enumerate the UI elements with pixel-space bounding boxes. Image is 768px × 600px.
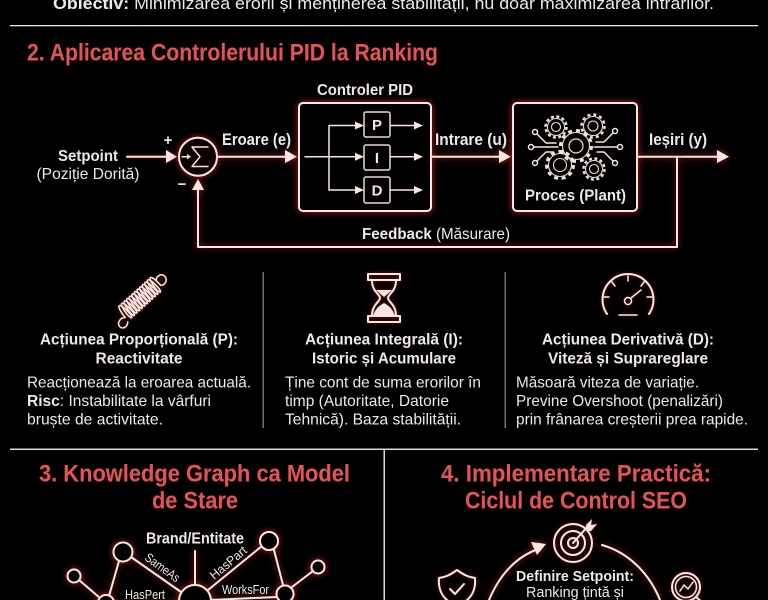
label: controler PID: Controler PID xyxy=(317,82,413,99)
label: intrare: Intrare (u) xyxy=(435,131,507,149)
text: define setpoint xyxy=(516,568,634,600)
text: integral description: timp (Autoritate, Datorie xyxy=(285,393,449,410)
plus sign: + xyxy=(164,132,173,149)
panel: SEO control cycle xyxy=(439,460,711,600)
heading: derivative xyxy=(542,332,714,368)
cycle arcs xyxy=(489,542,660,600)
text: proportional description: Reacționează la eroarea actuală. xyxy=(27,374,251,392)
heading: integral: Istoric și Acumulare xyxy=(312,350,456,368)
setpoint label: Setpoint xyxy=(58,148,119,165)
heading: section 2: 2. Aplicarea Controlerului PID la Ranking xyxy=(27,40,438,66)
heading: proportional xyxy=(40,332,238,368)
text: proportional description xyxy=(27,374,251,428)
heading: section 4 xyxy=(441,460,711,514)
text: derivative description: Măsoară viteza de variație. xyxy=(516,374,699,392)
label: brand entity: Brand/Entitate xyxy=(146,530,244,548)
heading: derivative: Viteză și Suprareglare xyxy=(548,350,708,368)
icon: magnifier chart xyxy=(672,573,703,600)
icon: shield xyxy=(439,570,475,600)
setpoint label: (Poziție Dorită) xyxy=(36,166,140,183)
text: integral description xyxy=(285,374,481,428)
edge labels: HasPart xyxy=(207,543,250,582)
arrow: setpoint to summing junction xyxy=(127,150,177,163)
edge labels: WorksFor xyxy=(222,583,269,597)
icon: gauge xyxy=(602,274,654,315)
text: integral description: Ține cont de suma erorilor în xyxy=(285,374,481,392)
heading: section 3: 3. Knowledge Graph ca Model xyxy=(39,460,350,488)
text: proportional description: bruște de activitate. xyxy=(27,412,163,428)
label: feedback: Feedback (Măsurare) xyxy=(362,226,510,243)
minus sign: − xyxy=(178,176,187,193)
heading: proportional: Reactivitate xyxy=(96,350,183,368)
knowledge graph network xyxy=(68,532,324,600)
arrow: controller to process xyxy=(431,150,511,163)
heading: proportional: Acțiunea Proporțională (P): xyxy=(40,332,238,348)
panel: proportional action xyxy=(27,270,251,428)
heading: section 3 xyxy=(39,460,350,514)
text: proportional description: Risc: Instabilitate la vârfuri xyxy=(27,393,211,410)
panel: integral action xyxy=(285,274,481,428)
process box xyxy=(513,103,637,211)
summing junction xyxy=(179,138,217,176)
arrow: output xyxy=(637,150,729,163)
text: derivative description xyxy=(516,374,748,428)
heading: section 3: de Stare xyxy=(152,488,238,514)
controller internals xyxy=(305,112,423,203)
block I: I xyxy=(375,150,379,167)
text: define setpoint: Definire Setpoint: xyxy=(516,568,634,585)
heading: integral: Acțiunea Integrală (I): xyxy=(305,332,463,348)
panel: PID block diagram xyxy=(36,82,729,247)
label: eroare: Eroare (e) xyxy=(222,131,291,149)
text: derivative description: prin frânarea creșterii prea rapide. xyxy=(516,412,748,428)
icon: spring xyxy=(109,270,172,330)
text: derivative description: Previne Overshoot (penalizări) xyxy=(516,393,723,410)
icon: target xyxy=(554,519,597,562)
controller PID box xyxy=(299,103,431,211)
edge labels xyxy=(125,543,269,600)
edge labels: SameAs xyxy=(142,550,183,585)
icon: hourglass xyxy=(368,274,400,322)
label: iesiri: Ieșiri (y) xyxy=(649,131,707,149)
label: proces plant: Proces (Plant) xyxy=(525,188,626,204)
panel: derivative action xyxy=(516,274,748,428)
block P: P xyxy=(372,117,382,134)
setpoint label xyxy=(36,148,140,183)
heading: integral xyxy=(305,332,463,368)
heading: derivative: Acțiunea Derivativă (D): xyxy=(542,332,714,348)
arrow: error to controller xyxy=(218,150,297,163)
icon: gears and circuit xyxy=(528,114,622,180)
heading: section 4: 4. Implementare Practică: xyxy=(441,460,711,488)
panel: knowledge graph xyxy=(39,460,350,600)
arrow: feedback loop xyxy=(192,157,677,247)
heading: section 4: Ciclul de Control SEO xyxy=(465,488,687,514)
block D: D xyxy=(372,182,383,200)
text: integral description: Tehnică). Baza stabilității. xyxy=(285,412,461,428)
